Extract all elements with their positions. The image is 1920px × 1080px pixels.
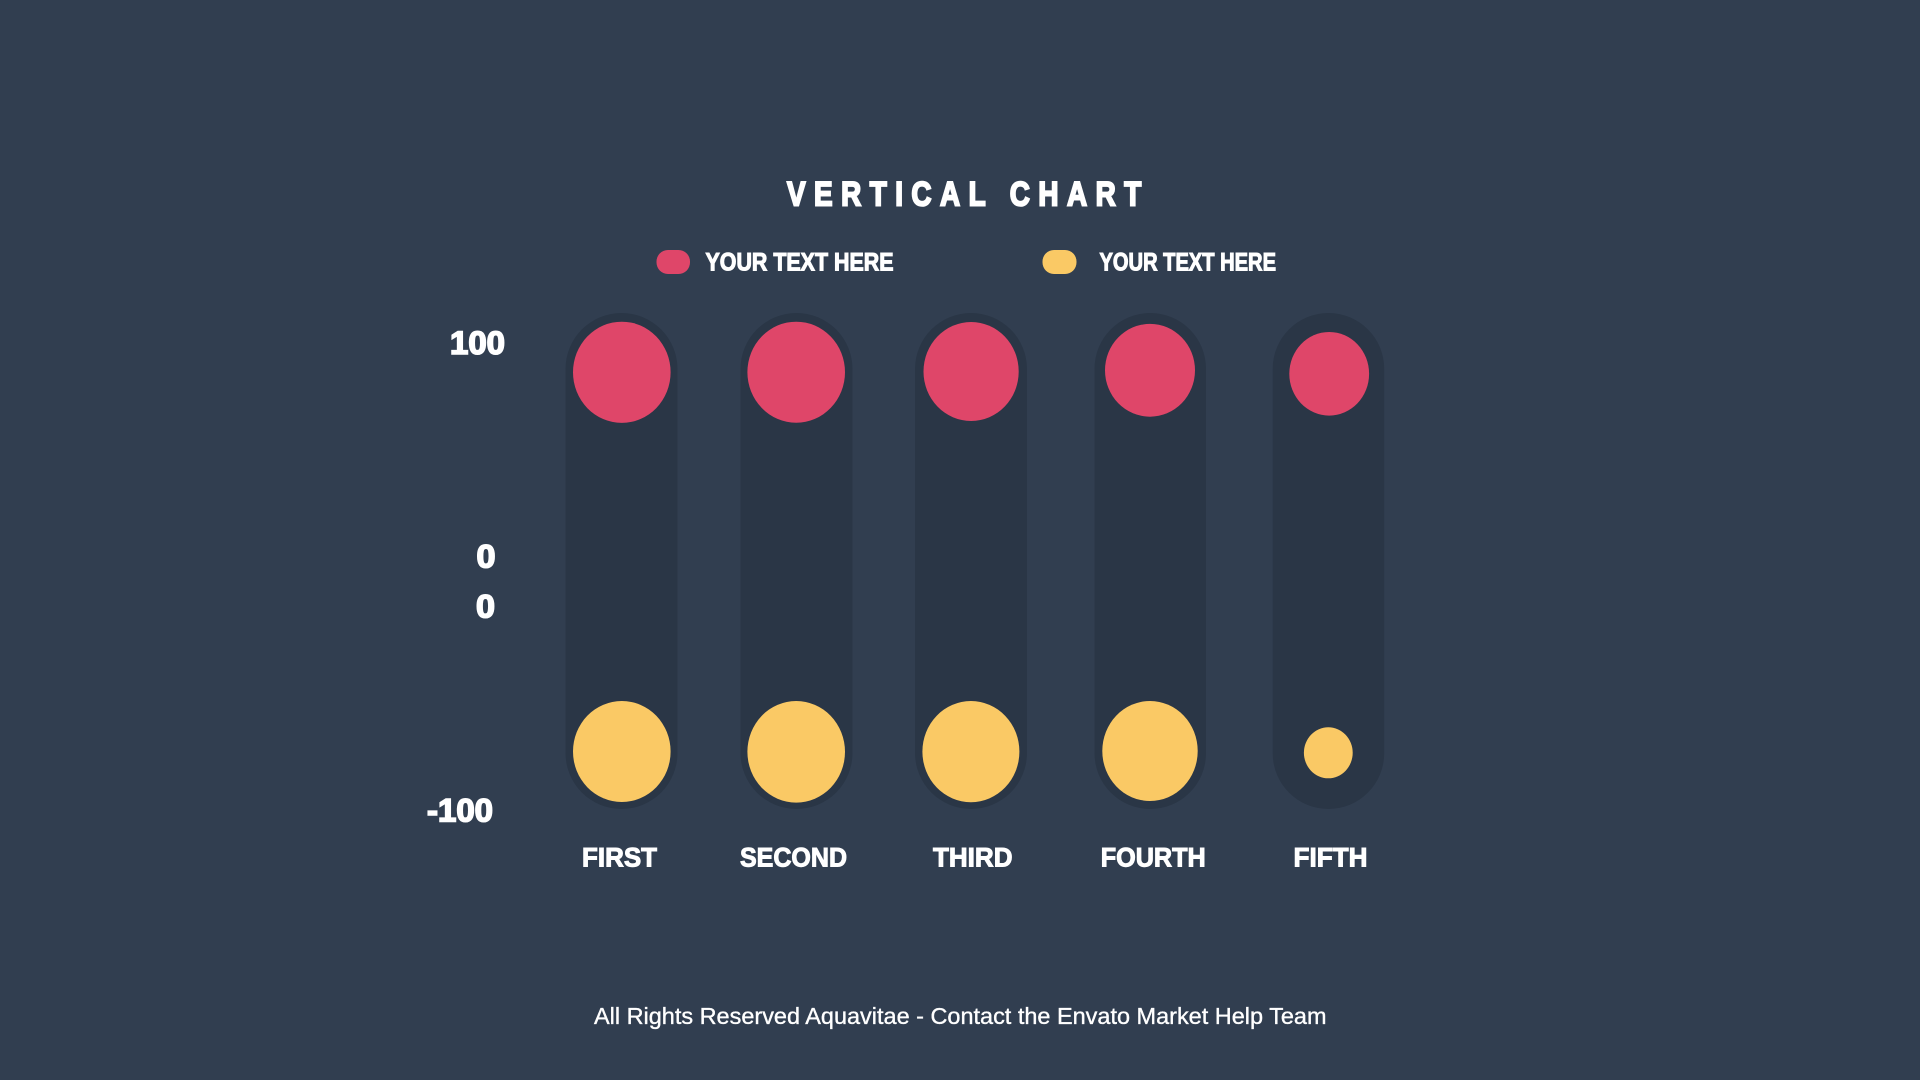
legend swatch: yellow [1042,250,1076,274]
column: fifth [1273,313,1384,872]
red dot [747,322,845,423]
yellow dot [1304,727,1353,778]
column: first [566,313,678,872]
track [915,313,1027,809]
label: SECOND [740,842,847,872]
legend label: red: YOUR TEXT HERE [706,248,894,276]
label: FIFTH [1294,842,1368,872]
track [1273,313,1384,809]
title: VERTICAL CHART [787,175,1141,213]
track [1094,313,1206,809]
column: fourth [1094,313,1206,872]
column: second [740,313,852,872]
label: THIRD [933,842,1012,872]
legend [656,248,1276,276]
axis label 100: 100 [450,325,505,361]
legend label: yellow: YOUR TEXT HERE [1100,248,1276,276]
track [740,313,852,809]
yellow dot [573,701,671,802]
red dot [1105,324,1195,417]
red dot [573,322,671,423]
column: third [915,313,1027,872]
axis label 0 upper: 0 [476,538,496,574]
yellow dot [1102,701,1198,801]
track [566,313,678,809]
red dot [1289,332,1369,416]
label: FOURTH [1101,842,1206,872]
axis label -100: -100 [427,792,493,828]
axis label 0 lower: 0 [476,588,495,624]
yellow dot [747,701,845,803]
yellow dot [922,701,1019,802]
footer text: All Rights Reserved Aquavitae - Contact the Envato Market Help Team [594,1003,1326,1029]
red dot [924,322,1019,421]
label: FIRST [582,842,657,872]
legend swatch: red [656,250,690,274]
y axis labels [427,325,505,828]
